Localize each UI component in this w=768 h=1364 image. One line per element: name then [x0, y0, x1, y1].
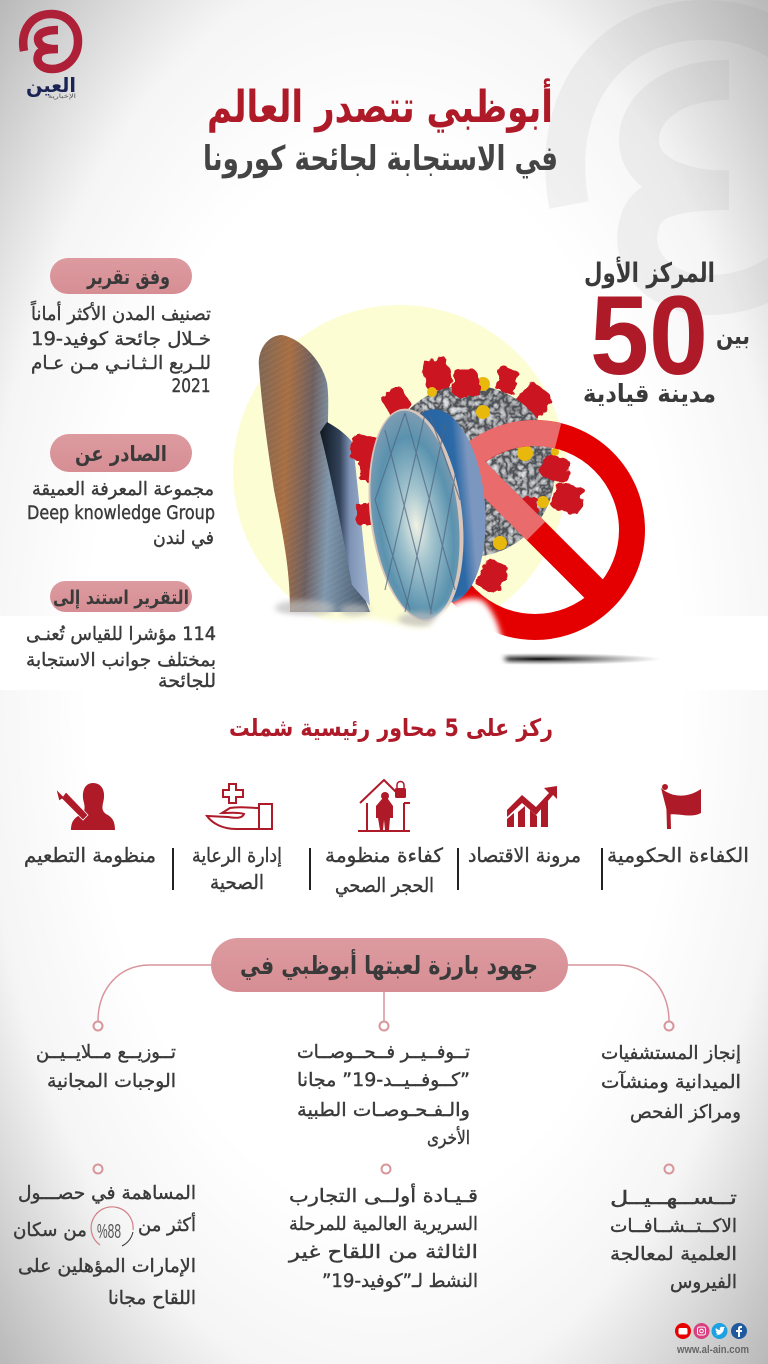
website url: www.al-ain.com	[676, 1344, 749, 1356]
indicators description: بمختلف جوانب الاستجابة	[26, 650, 216, 671]
pill heading	[50, 258, 192, 294]
subtitle: في الاستجابة لجائحة كورونا	[203, 139, 558, 179]
panel: report based on	[26, 581, 216, 692]
effort: clinical trials: الثالثة من اللقاح غير	[288, 1242, 478, 1263]
indicators description: للجائحة	[158, 671, 216, 692]
virus	[348, 356, 585, 595]
effort: scientific discoveries: الاكــتــشــافــات	[610, 1216, 737, 1237]
effort: vaccination share: الإمارات المؤهلين على	[18, 1256, 196, 1277]
pill heading	[50, 581, 192, 612]
effort: clinical trials	[288, 1183, 478, 1292]
white band behind hero	[0, 616, 768, 690]
indicators description: 114 مؤشرا للقياس تُعنـى	[26, 624, 216, 645]
first place label: المركز الأول	[584, 256, 715, 289]
background watermark logo	[565, 20, 768, 295]
Aldar building disk	[357, 403, 493, 627]
title: أبوظبي تتصدر العالم	[207, 78, 553, 133]
hero illustration	[233, 305, 662, 690]
panel: according to report	[30, 258, 211, 397]
effort: scientific discoveries: الفيروس	[670, 1272, 737, 1293]
virus front spikes	[453, 370, 572, 515]
left info column	[26, 258, 216, 692]
ranking callout	[583, 256, 750, 408]
icon: youtube	[675, 1323, 691, 1339]
label: vaccination: منظومة التطعيم	[24, 844, 156, 867]
effort: field hospitals: إنجاز المستشفيات	[601, 1043, 741, 1064]
report description: 2021	[172, 376, 210, 397]
effort: clinical trials: قـيـادة أولــى التجارب	[289, 1183, 478, 1207]
report description: خـلال جائحة كوفيد-19	[31, 329, 211, 350]
effort: scientific discoveries: تــســهــيــل	[610, 1188, 737, 1209]
effort: free meals: الوجبات المجانية	[47, 1071, 176, 1092]
label: quarantine: كفاءة منظومة	[325, 844, 444, 867]
label: quarantine: الحجر الصحي	[335, 874, 434, 897]
report description: للـربع الـثـانـي مـن عـام	[31, 353, 211, 374]
label: government: الكفاءة الحكومية	[607, 844, 749, 867]
yellow circle	[233, 305, 567, 639]
indicators description	[26, 624, 216, 692]
issuer description	[27, 479, 215, 549]
pill heading: الصادر عن	[75, 442, 167, 466]
icon: growth chart	[507, 786, 557, 827]
effort: clinical trials: السريرية العالمية للمرحلة	[289, 1214, 478, 1235]
axis labels	[24, 844, 749, 897]
issuer description: في لندن	[153, 528, 214, 549]
clouds	[236, 599, 506, 690]
icon: twitter	[712, 1323, 728, 1339]
effort: scientific discoveries	[610, 1188, 737, 1293]
effort: free tests: ”كــوفــيــد-19” مجانا	[297, 1070, 470, 1091]
effort: free tests: تــوفــيــر فــحــوصــات	[297, 1042, 470, 1063]
report description	[30, 300, 211, 397]
virus sphere	[383, 385, 555, 557]
effort: clinical trials: النشط لـ”كوفيد-19”	[322, 1271, 478, 1292]
virus spikes	[348, 356, 585, 595]
five axes row	[24, 780, 749, 897]
report description: تصنيف المدن الأكثر أماناً	[30, 300, 211, 325]
pill heading: وفق تقرير	[86, 265, 170, 289]
virus yellow nodes	[427, 377, 559, 550]
label: health care	[192, 844, 282, 894]
label: quarantine	[325, 844, 444, 897]
leading cities label: مدينة قيادية	[583, 379, 716, 408]
effort: field hospitals: الميدانية ومنشآت	[601, 1070, 741, 1093]
logo mark	[23, 14, 78, 69]
effort: free meals	[36, 1042, 176, 1092]
label: health care: الصحية	[210, 871, 264, 894]
icon: facebook	[731, 1323, 747, 1339]
effort: vaccination share: المساهمة في حصـــول	[18, 1183, 196, 1204]
ground shadow	[418, 653, 662, 665]
effort: field hospitals	[601, 1043, 741, 1123]
Capital Gate tower	[259, 335, 370, 612]
logo name: العين	[26, 73, 76, 97]
effort: vaccination share: اللقاح مجانا	[108, 1288, 196, 1309]
effort: vaccination share	[13, 1183, 196, 1309]
icon: flag	[661, 784, 701, 829]
efforts heading pill: جهود بارزة لعبتها أبوظبي في	[240, 949, 538, 981]
88 percent badge: %88	[97, 1221, 121, 1243]
icon: care hand	[207, 784, 272, 829]
issuer description: Deep knowledge Group	[27, 503, 215, 524]
efforts connectors	[94, 965, 674, 1174]
logo tagline: الإخبارية	[48, 93, 76, 100]
between label: بين	[716, 322, 750, 350]
prohibition sign	[438, 433, 632, 627]
axes heading: ركز على 5 محاور رئيسية شملت	[229, 714, 553, 742]
icon: vaccination person	[56, 783, 115, 830]
logo	[23, 14, 78, 100]
effort: free tests: والـفـحـوصـات الطبية	[297, 1100, 470, 1121]
pill heading: التقرير استند إلى	[53, 587, 189, 609]
icon: instagram	[694, 1323, 710, 1339]
number 50: 50	[590, 273, 708, 398]
effort: free tests: الأخرى	[427, 1126, 470, 1149]
panel: issued by	[27, 434, 215, 549]
label: economy: مرونة الاقتصاد	[468, 844, 581, 867]
effort: field hospitals: ومراكز الفحص	[630, 1102, 741, 1123]
efforts heading pill	[211, 938, 568, 992]
label: health care: إدارة الرعاية	[192, 844, 282, 868]
effort: free tests	[297, 1042, 470, 1149]
effort: vaccination share: أكثر من	[138, 1212, 196, 1236]
footer social	[675, 1323, 749, 1356]
88 percent badge	[91, 1207, 133, 1246]
effort: vaccination share: من سكان	[13, 1220, 87, 1241]
effort: free meals: تــوزيــع مــلايــيــن	[36, 1042, 176, 1063]
issuer description: مجموعة المعرفة العميقة	[32, 479, 214, 500]
pill heading	[50, 434, 192, 472]
effort: scientific discoveries: العلمية لمعالجة	[610, 1244, 737, 1265]
icon: quarantine house	[358, 780, 410, 831]
